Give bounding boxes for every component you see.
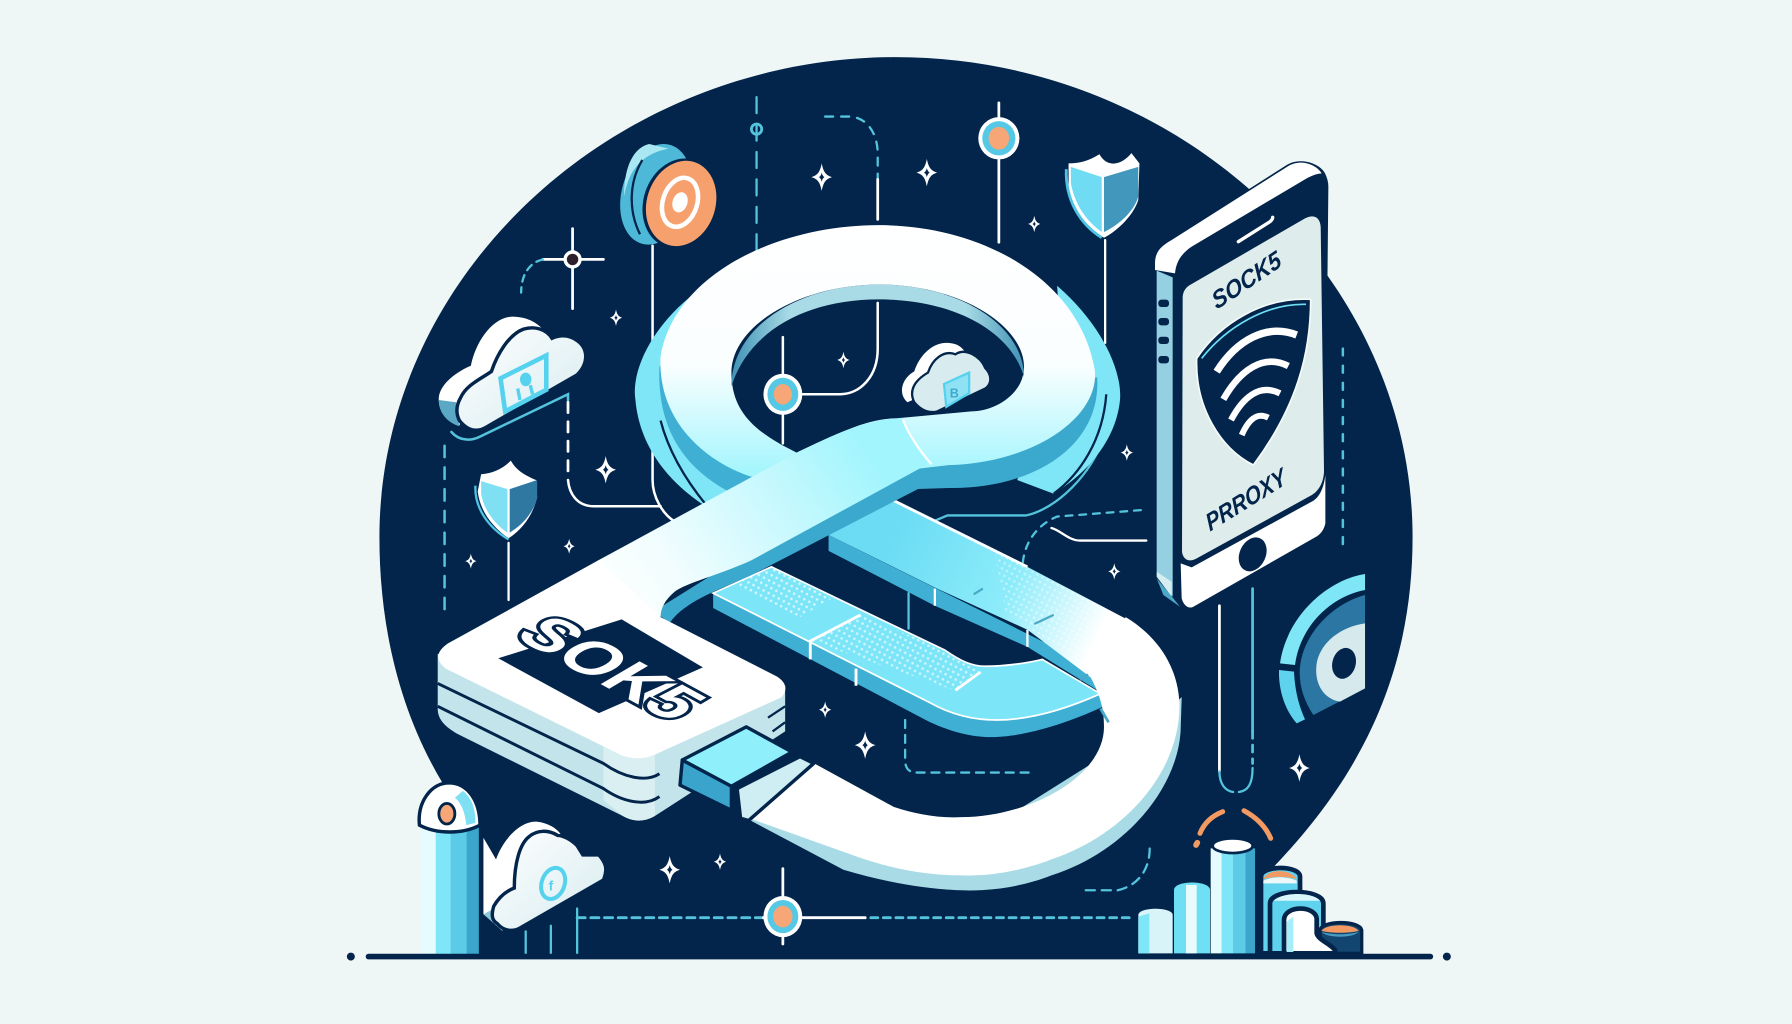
phone: [1155, 161, 1328, 609]
cyan ears behind upper loop: [635, 286, 1120, 505]
phone body: [1155, 161, 1328, 609]
bar chart cylinders: [1138, 838, 1362, 953]
phone screen: [1182, 216, 1324, 560]
lines inside loop hole: [783, 303, 878, 443]
sparkle inside loop: [837, 352, 850, 368]
icon: orange target disc: [609, 135, 729, 258]
phone side: [1157, 271, 1173, 597]
upper channel top surface: [829, 499, 1160, 682]
home button: [1235, 534, 1271, 575]
icon: bottom cloud: f: [549, 878, 554, 893]
USB connector: [680, 727, 814, 821]
node: crosshair: [563, 250, 582, 269]
baseline: [347, 953, 1451, 961]
side of large U band: [746, 697, 1182, 890]
device body: [438, 560, 785, 821]
large white U band: [746, 617, 1179, 876]
icon: small cloud inside loop: [902, 343, 990, 412]
phone rim: [1155, 163, 1322, 273]
halftone and seams on upper channel: [891, 499, 1143, 722]
shield with wifi arcs: [1197, 299, 1311, 465]
upper channel side strip: [829, 535, 1109, 697]
label SOCK5: SOCK5: [1208, 246, 1286, 316]
sparkle stars: [465, 159, 1310, 883]
orange signal arcs: [1196, 811, 1271, 845]
icon: bottom cloud: [483, 822, 606, 931]
straight ribbon side left: [654, 451, 920, 623]
ribbon seam: [903, 419, 931, 464]
label PRROXY: PRROXY: [1202, 463, 1291, 537]
icon: shield top right: [1066, 153, 1139, 238]
icon: small cloud inside loop: B: [950, 387, 959, 401]
phone side buttons: [1158, 300, 1169, 363]
inner wall of loop: [731, 285, 1024, 386]
left pillar: [419, 783, 480, 957]
device label: SOK5: SOK5: [501, 606, 723, 730]
phone lower bezel: [1181, 475, 1325, 608]
upper loop side: [659, 366, 800, 498]
node: top right: [978, 117, 1019, 159]
icon: shield left: [475, 461, 537, 539]
bottom node: [763, 896, 802, 937]
icon: dial on right: [1279, 574, 1365, 723]
icon: cloud left: [439, 317, 586, 430]
dark circle backdrop: [379, 57, 1413, 957]
speaker slot: [1238, 217, 1273, 242]
lower channel band: [713, 567, 1104, 737]
node inside loop: [763, 374, 802, 415]
straight ribbon top: [480, 418, 928, 640]
ribbon side right: [914, 377, 1097, 489]
network lines and dashed connectors: [445, 97, 1343, 954]
upper loop white ring: [660, 225, 1095, 480]
